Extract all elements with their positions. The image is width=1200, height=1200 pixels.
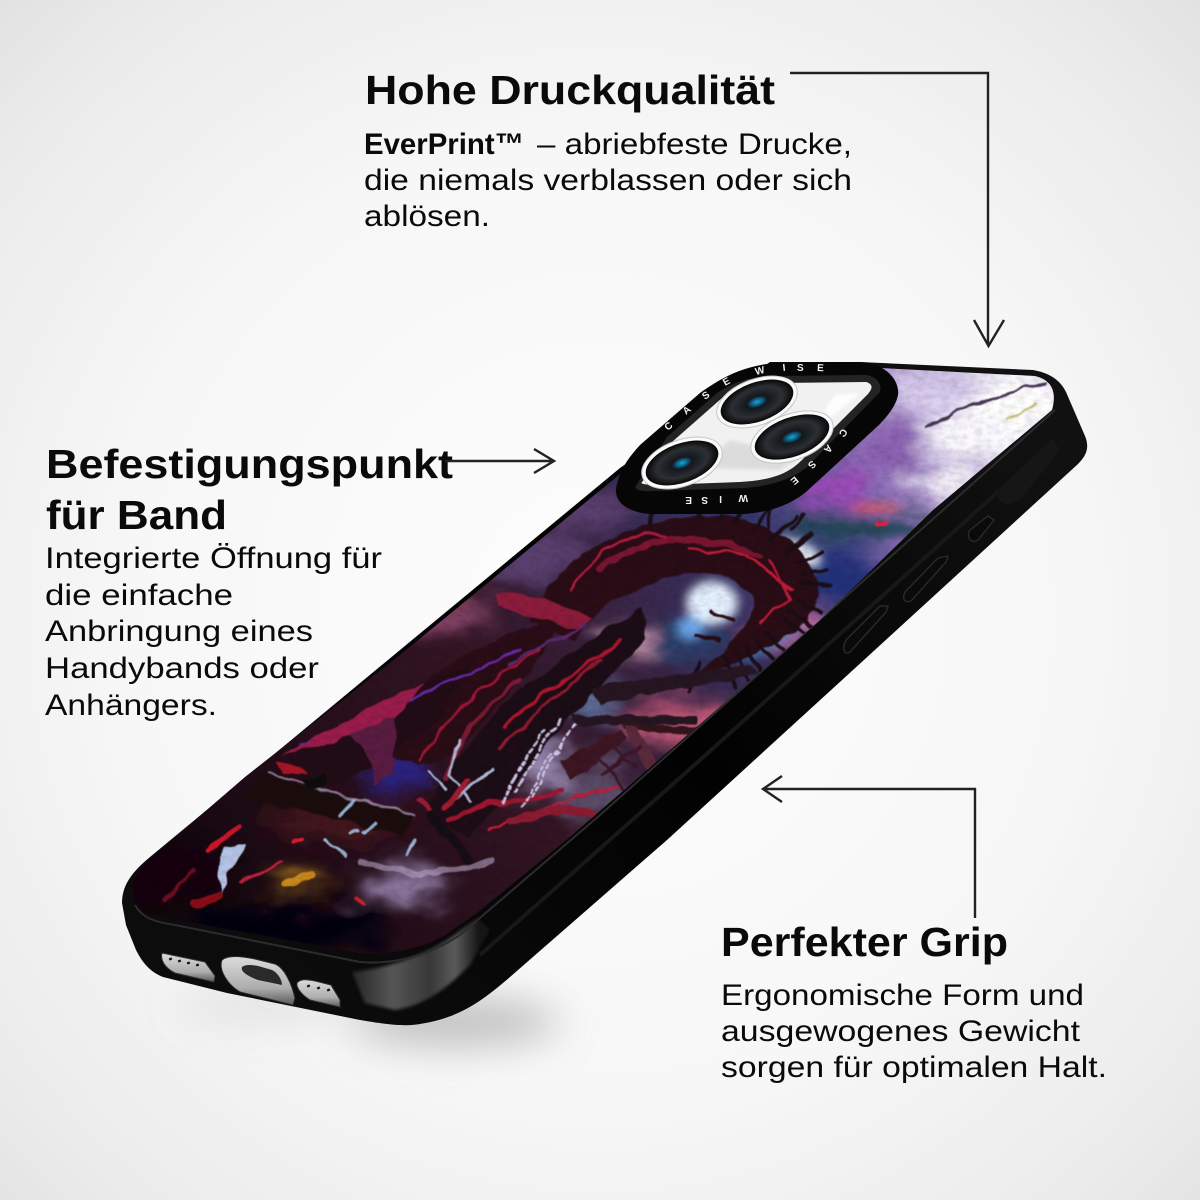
speaker holes: [170, 958, 198, 966]
painted dragon and scene: [165, 385, 1045, 905]
rim text: E: [817, 363, 824, 374]
dragon fur: [650, 492, 828, 690]
rim text: A: [681, 404, 693, 417]
rim text: S: [701, 494, 708, 505]
body text: sorgen für optimalen Halt.: [721, 1051, 1107, 1084]
button: action: [968, 516, 994, 541]
arrow: strap attachment: [445, 449, 554, 473]
dragon figure: [424, 608, 646, 838]
case body: [122, 362, 1087, 1025]
heading: Perfekter Grip: [721, 919, 1008, 965]
rim text: S: [805, 458, 818, 471]
body text: [364, 128, 852, 233]
rim text: E: [685, 494, 692, 505]
rim text: W: [754, 365, 766, 378]
torii gate: [560, 666, 760, 780]
callout: print quality: [364, 67, 852, 233]
heading: für Band: [46, 492, 227, 538]
rim text: C: [836, 426, 849, 439]
body text: EverPrint™: [364, 128, 524, 161]
arrow: grip: [763, 776, 975, 918]
rim text: E: [788, 474, 800, 487]
callout: strap attachment: [45, 441, 453, 722]
body text: – abriebfeste Drucke,: [537, 128, 852, 161]
claws and reflections: [420, 740, 490, 860]
phone shadow: [180, 993, 560, 1046]
figure streaks: [300, 625, 620, 830]
paint grain: [186, 369, 1054, 908]
foreground debris: [165, 800, 490, 905]
dragon veins: [570, 535, 790, 622]
bump inner: [636, 375, 880, 491]
body text: [721, 979, 1107, 1084]
button: volume up: [904, 556, 948, 602]
body text: die niemals verblassen oder sich: [364, 164, 852, 197]
lens: top: [710, 366, 804, 438]
heading: Hohe Druckqualität: [365, 67, 775, 113]
case side ridge: [135, 410, 1055, 963]
arrow: print quality: [790, 73, 1004, 346]
rim text: S: [700, 389, 712, 402]
rim text: W: [738, 492, 748, 503]
lens: left: [635, 427, 729, 499]
charging port: [221, 956, 295, 1005]
rim text: E: [721, 376, 733, 389]
body text: Handybands oder: [45, 652, 319, 685]
body text: Ergonomische Form und: [721, 979, 1084, 1012]
artwork base: [171, 368, 1054, 954]
rim text: C: [663, 420, 675, 433]
ledge: [240, 772, 415, 835]
body text: ablösen.: [364, 200, 490, 233]
speaker right holes: [308, 985, 329, 991]
rim text: I: [719, 493, 722, 504]
button: cutout: [997, 438, 1060, 504]
rim text: S: [797, 363, 804, 374]
side buttons: [844, 438, 1060, 653]
rim text: A: [821, 442, 834, 455]
torii lattice: [585, 735, 640, 790]
rim text: [663, 363, 849, 505]
bump rim: [616, 362, 898, 514]
heading: [46, 441, 453, 538]
artwork panel: [132, 368, 1054, 954]
body text: ausgewogenes Gewicht: [721, 1015, 1081, 1048]
button: volume down: [844, 606, 888, 653]
lens: right: [744, 401, 840, 473]
port slot: [242, 965, 282, 985]
case corner highlight: [352, 917, 490, 1010]
body text: Integrierte Öffnung für: [45, 542, 382, 575]
red wing: [498, 592, 592, 630]
sky details: [876, 385, 1045, 524]
body text: [45, 542, 382, 722]
scales: [502, 720, 575, 810]
body text: Anhängers.: [45, 689, 217, 722]
body text: die einfache: [45, 579, 233, 612]
magenta streak: [282, 682, 425, 756]
rim text: I: [782, 363, 786, 374]
speaker right: [297, 980, 340, 1007]
moon glow: [676, 504, 902, 665]
body text: Anbringung eines: [45, 615, 313, 648]
camera plate: [642, 382, 872, 485]
camera bump: [616, 362, 898, 514]
callout: grip: [721, 919, 1107, 1084]
heading: Befestigungspunkt: [46, 441, 453, 487]
dragon arch: [530, 516, 818, 682]
artwork colour clouds: [130, 375, 1055, 947]
speaker left: [162, 953, 215, 982]
phone with case: [100, 340, 1100, 1025]
